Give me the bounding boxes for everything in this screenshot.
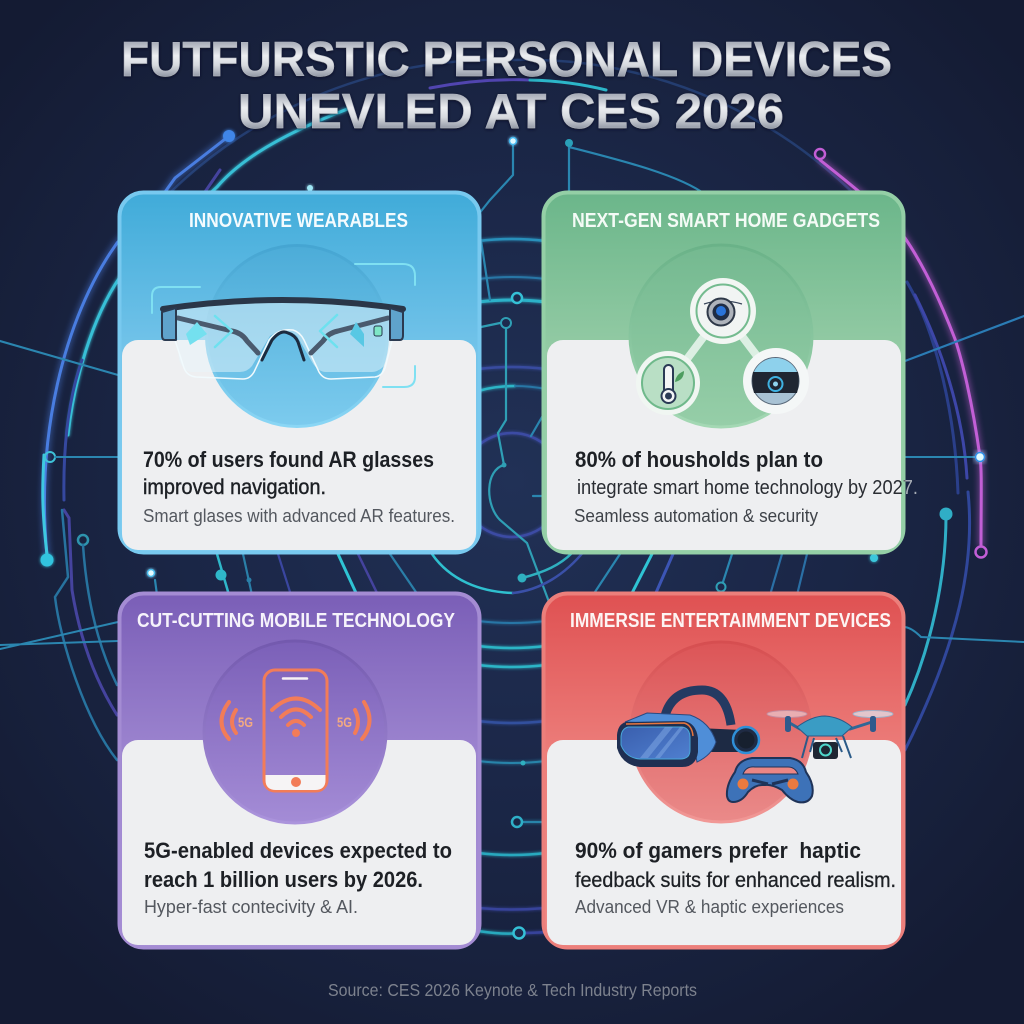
stat: mobile	[144, 838, 452, 892]
description: smart home: Seamless automation & security	[574, 506, 818, 526]
stat: smart home: integrate smart home technology by 2027.	[577, 477, 918, 499]
description: mobile: Hyper-fast contecivity & AI.	[144, 897, 358, 917]
panel: innovative wearables	[120, 192, 480, 552]
white text panel	[122, 740, 476, 945]
panel: smart home	[544, 192, 918, 552]
icon circle	[206, 246, 388, 426]
stat: entertainment: feedback suits for enhanced realism.	[575, 869, 896, 892]
icon: 5G phone	[222, 670, 370, 791]
title: UNEVLED AT CES 2026	[238, 85, 784, 139]
stat: entertainment: 90% of gamers prefer haptic	[575, 838, 861, 863]
white text panel	[547, 340, 901, 550]
title	[121, 33, 892, 139]
heading: entertainment: IMMERSIE ENTERTAIMMENT DEVICES	[570, 609, 891, 632]
stat: mobile: 5G-enabled devices expected to	[144, 838, 452, 863]
description: wearables: Smart glases with advanced AR features.	[143, 506, 455, 526]
white text panel	[547, 740, 901, 945]
icon: drone	[767, 710, 893, 759]
stat: entertainment	[575, 838, 896, 892]
heading: wearables: INNOVATIVE WEARABLES	[189, 209, 408, 232]
left cyan arc	[68, 108, 350, 435]
icon: connected devices	[636, 278, 809, 415]
panel: mobile technology	[120, 594, 480, 948]
stat: smart home	[575, 447, 918, 499]
icon: 5G phone: 5G	[337, 714, 352, 730]
stat: wearables: 70% of users found AR glasses	[143, 447, 434, 472]
icon circle	[631, 642, 811, 822]
source line: Source: CES 2026 Keynote & Tech Industry Reports	[328, 980, 697, 1000]
stat: mobile: reach 1 billion users by 2026.	[144, 867, 423, 892]
stat: smart home: 80% of housholds plan to	[575, 447, 823, 472]
panel: entertainment	[544, 594, 904, 948]
description: entertainment: Advanced VR & haptic experiences	[575, 897, 844, 917]
heading: smart home: NEXT-GEN SMART HOME GADGETS	[572, 209, 880, 232]
title: FUTFURSTIC PERSONAL DEVICES	[121, 33, 892, 87]
left outer blue arc	[45, 136, 229, 555]
icon: 5G phone: 5G	[238, 714, 253, 730]
icon circle	[630, 245, 812, 427]
icon circle	[204, 641, 386, 823]
stat: wearables	[143, 447, 434, 499]
icon: game controller	[727, 758, 813, 802]
right magenta arc	[820, 160, 981, 546]
white text panel	[122, 340, 476, 550]
icon: AR glasses	[152, 264, 415, 387]
stat: wearables: improved navigation.	[143, 476, 326, 499]
heading: mobile: CUT-CUTTING MOBILE TECHNOLOGY	[137, 609, 455, 632]
central traces	[155, 145, 807, 610]
icon: VR headset	[617, 690, 759, 767]
